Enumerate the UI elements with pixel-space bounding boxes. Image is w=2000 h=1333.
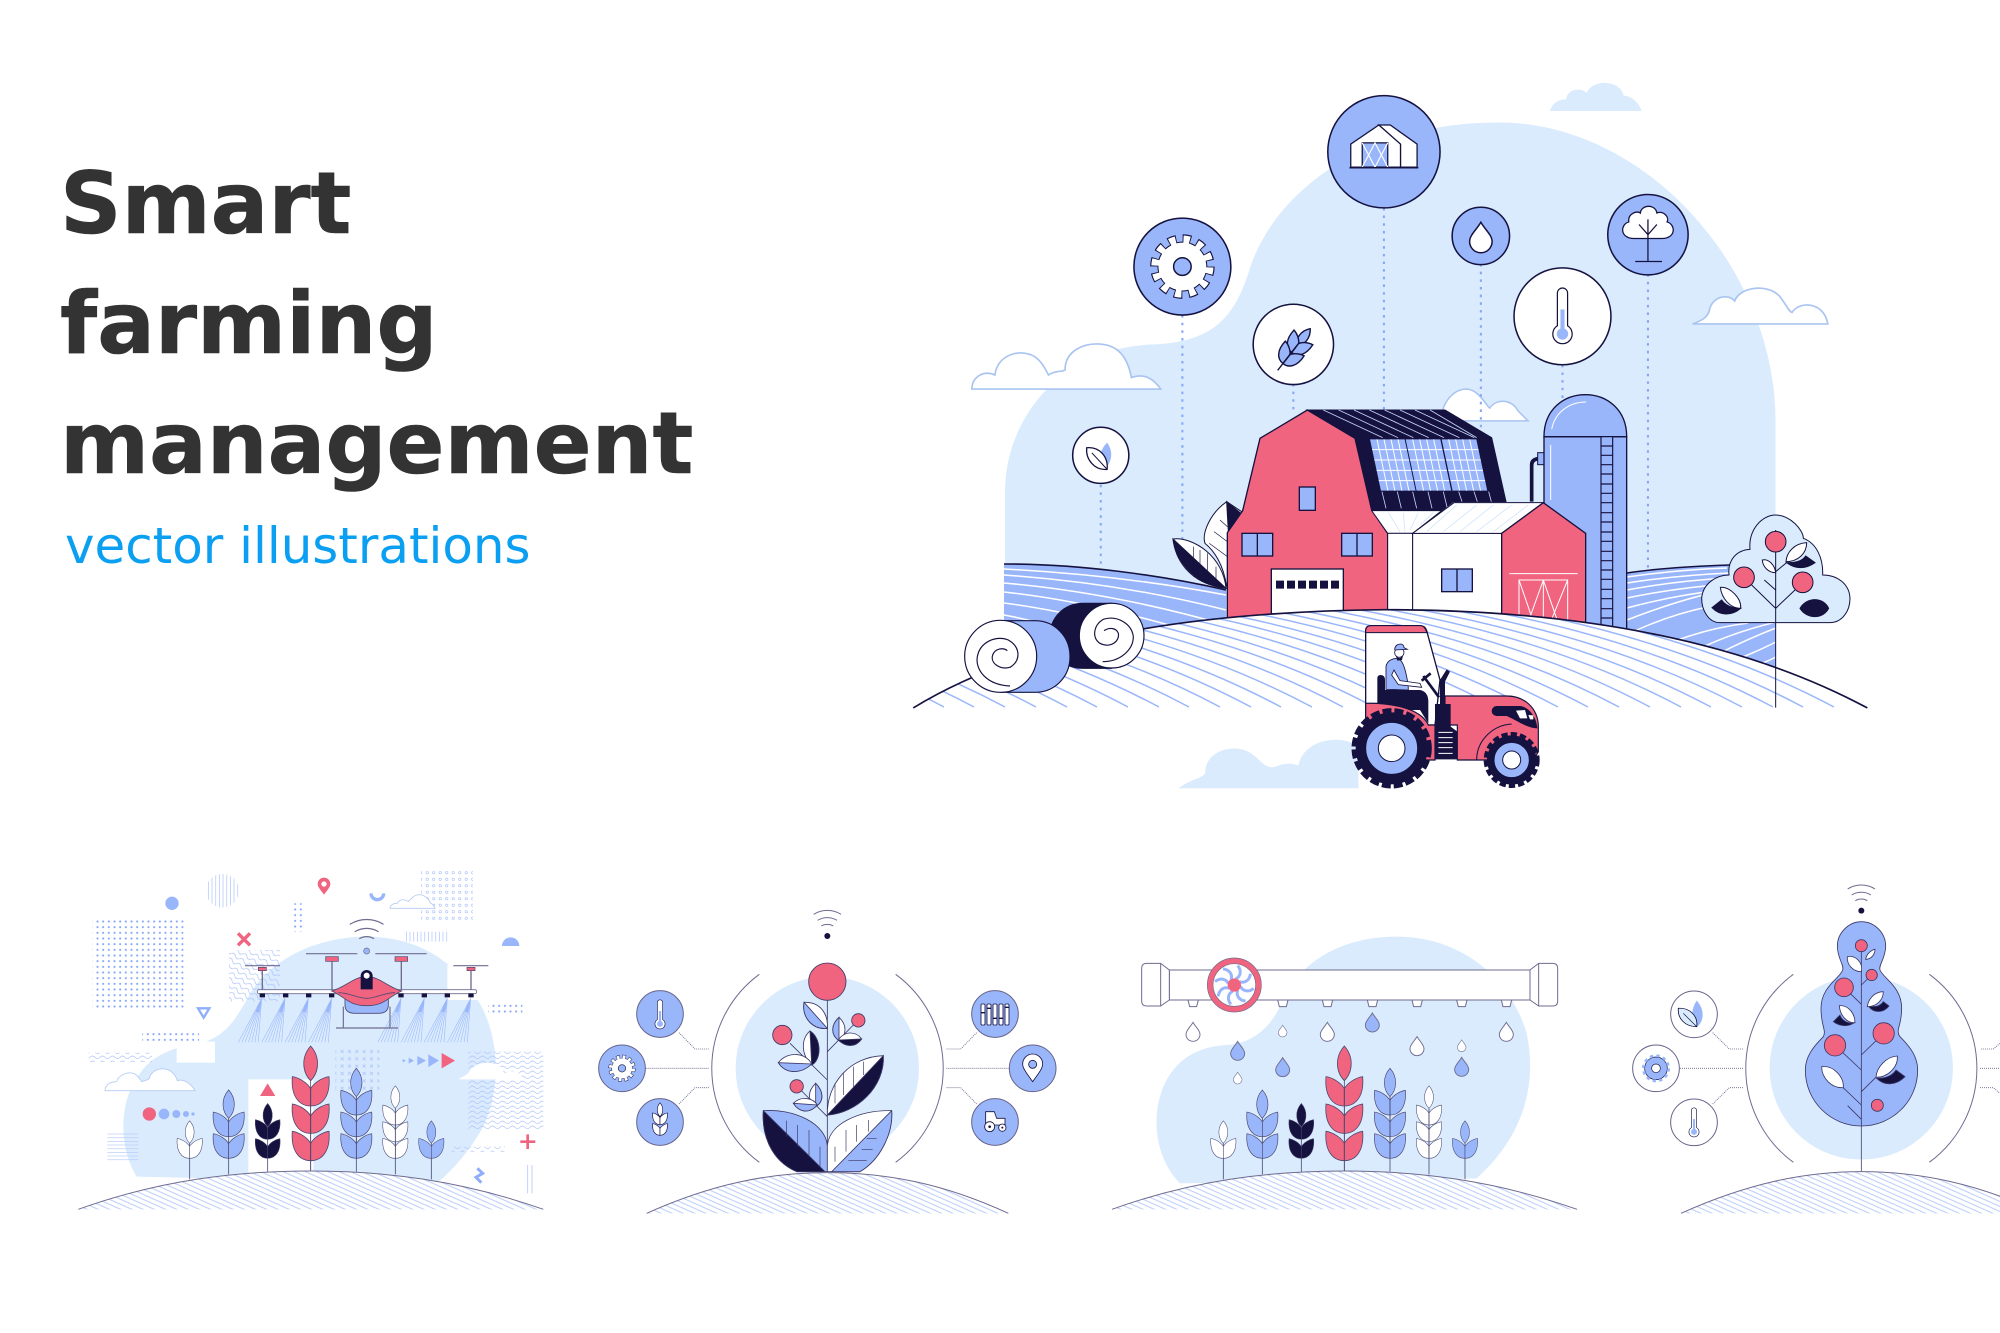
silo body xyxy=(1544,437,1627,633)
left field top edge xyxy=(1004,564,1226,590)
icon: thermometer xyxy=(637,991,683,1037)
ring grid xyxy=(421,870,473,922)
engine grille xyxy=(1435,704,1457,759)
silo ladder xyxy=(1601,437,1613,630)
garage door xyxy=(1271,569,1343,614)
silo pipe xyxy=(1532,459,1538,502)
silo highlights xyxy=(1551,402,1586,500)
right field xyxy=(1627,564,1776,680)
driver xyxy=(1386,644,1422,690)
tree fruit xyxy=(1824,940,1894,1111)
driver arm xyxy=(1392,670,1422,687)
boom nozzles xyxy=(260,989,474,1001)
exhaust xyxy=(1440,669,1450,704)
driver cap xyxy=(1395,644,1407,650)
background blob xyxy=(1005,122,1775,689)
white building window xyxy=(1442,569,1472,592)
icon: gear xyxy=(599,1045,645,1092)
connector wall xyxy=(1388,533,1413,613)
icon: map pin xyxy=(318,878,330,895)
tree branches xyxy=(1833,950,1887,1126)
blob white cut-outs xyxy=(177,965,490,1173)
wave strip left xyxy=(89,1053,152,1062)
bracket arcs xyxy=(712,974,943,1162)
half ring xyxy=(369,893,385,901)
solar panel 3 xyxy=(1442,439,1487,491)
tractor cab xyxy=(1366,626,1440,725)
nozzles xyxy=(1188,1000,1512,1007)
plus mark xyxy=(520,1134,535,1149)
icon: thermometer xyxy=(1514,268,1611,365)
driver beard xyxy=(1396,654,1403,661)
left field rows xyxy=(1004,569,1226,665)
rear body xyxy=(1366,703,1435,760)
icon: thermometer xyxy=(1671,1099,1717,1146)
icon: leaves xyxy=(1073,427,1129,483)
crops and hill xyxy=(1112,1046,1577,1209)
pipe right cap xyxy=(1530,963,1558,1006)
arrow row xyxy=(403,1053,455,1068)
panel: plant monitoring xyxy=(599,910,1056,1213)
tree leaves xyxy=(1822,949,1905,1088)
background blob xyxy=(123,937,496,1183)
big leaf: lower left xyxy=(763,1110,827,1172)
drone wifi xyxy=(350,920,383,954)
x pattern xyxy=(335,1048,379,1092)
cross mark xyxy=(238,933,250,945)
white building roof lines xyxy=(1427,505,1528,532)
big leaf: lower right xyxy=(827,1111,892,1172)
barn roof xyxy=(1307,410,1506,511)
background circle xyxy=(736,977,919,1160)
dot grid small xyxy=(142,1032,199,1043)
wave strip right xyxy=(452,1147,505,1152)
dotted connector lines xyxy=(1101,208,1648,577)
hay bale: front xyxy=(965,620,1070,692)
drone body xyxy=(332,977,402,1006)
icon: barn xyxy=(1328,96,1440,208)
red gable shed xyxy=(1502,503,1586,627)
solar panel 2 xyxy=(1406,439,1451,491)
driver head xyxy=(1395,648,1404,657)
tree crown xyxy=(1805,922,1918,1126)
background circle xyxy=(1770,976,1953,1160)
dots row xyxy=(143,1107,195,1121)
heading: farming: farming xyxy=(60,275,438,374)
panel: drone spraying xyxy=(78,870,543,1209)
irrigation pipe xyxy=(1142,963,1558,1007)
icon: tree xyxy=(1608,195,1688,275)
tractor xyxy=(1354,626,1538,786)
heading: Smart: Smart xyxy=(60,155,351,254)
left field xyxy=(1004,564,1226,650)
rotors xyxy=(245,954,488,966)
dot grid column xyxy=(292,903,304,932)
cloud: right xyxy=(458,1063,523,1079)
silo dome xyxy=(1544,395,1627,437)
cloud: centre xyxy=(1441,389,1528,421)
wave swatch right xyxy=(468,1052,543,1129)
hay bales xyxy=(965,603,1144,692)
mini hill xyxy=(647,1173,1008,1213)
icon: wheat xyxy=(1253,304,1334,385)
headlight band xyxy=(1492,706,1537,728)
half disc xyxy=(502,937,519,946)
icon: water drop xyxy=(1452,207,1510,265)
striped circle xyxy=(206,874,239,907)
plant stem and branches xyxy=(790,1000,853,1172)
hill crop rows xyxy=(928,610,1864,708)
heading: management: management xyxy=(60,395,693,494)
cloud: left xyxy=(972,344,1161,389)
panel: tree monitoring xyxy=(1633,885,2000,1213)
wave swatch xyxy=(229,950,280,1002)
background blob xyxy=(1157,937,1530,1183)
big leaf: middle right xyxy=(827,1056,883,1115)
right field top edge xyxy=(1627,565,1730,573)
water drops xyxy=(1186,1013,1513,1084)
cloud: top xyxy=(1550,83,1642,111)
lines swatch xyxy=(107,1132,138,1161)
icon: gear xyxy=(1134,218,1231,315)
plant xyxy=(763,963,892,1172)
dot grid right xyxy=(488,1002,522,1013)
barn red body xyxy=(1227,410,1388,620)
icon: tractor xyxy=(972,1099,1018,1145)
icon: leaves xyxy=(1671,991,1717,1038)
icon: map pin xyxy=(1009,1045,1056,1092)
sprays xyxy=(238,998,471,1042)
white building wall xyxy=(1413,533,1502,617)
tank and legs xyxy=(336,995,398,1028)
dot grid large xyxy=(93,919,183,1010)
right field rows xyxy=(1627,568,1776,663)
main hill xyxy=(913,610,1867,708)
tree crown xyxy=(1702,515,1850,623)
bracket arcs xyxy=(1746,974,1977,1162)
title xyxy=(60,155,693,575)
cloud: top xyxy=(390,895,435,908)
wifi signal xyxy=(814,910,841,939)
roof stripes xyxy=(1323,410,1491,508)
berries xyxy=(773,1014,865,1093)
icon: gear xyxy=(1633,1045,1679,1092)
rotor hubs and masts xyxy=(258,957,475,990)
cloud: left xyxy=(105,1069,195,1091)
cloud: bottom xyxy=(1179,740,1358,788)
pipe left cap xyxy=(1142,963,1169,1006)
small red triangle xyxy=(260,1083,275,1096)
tree on right xyxy=(1702,515,1850,708)
solar panels xyxy=(1370,439,1487,491)
barn and silo xyxy=(1173,395,1627,633)
plant: low leaf xyxy=(1173,539,1226,588)
barn window right xyxy=(1342,533,1372,556)
tree stem xyxy=(1860,950,1863,1172)
sensor connectors xyxy=(1680,1033,2000,1104)
steering xyxy=(1422,673,1439,697)
white building roof xyxy=(1413,503,1543,533)
hood xyxy=(1445,696,1538,760)
small leaves xyxy=(778,1002,862,1111)
barn window top xyxy=(1299,487,1315,510)
connector roof xyxy=(1372,511,1442,533)
zigzag xyxy=(476,1168,483,1183)
wifi signal xyxy=(1848,885,1875,914)
fan valve xyxy=(1207,958,1261,1012)
double lines xyxy=(528,1165,532,1193)
rear wheel xyxy=(1354,711,1429,786)
striped bar xyxy=(403,932,447,942)
solar panel 1 xyxy=(1370,439,1416,491)
tree fruit xyxy=(1734,531,1813,593)
mini hill xyxy=(1681,1172,2000,1213)
spray boom xyxy=(257,990,477,994)
driver body xyxy=(1386,659,1408,690)
subtitle: vector illustrations xyxy=(65,517,531,575)
barn window left xyxy=(1242,533,1273,556)
triangle outline xyxy=(198,1008,209,1018)
periwinkle circle xyxy=(165,897,179,910)
hay bale: rear xyxy=(1050,603,1144,668)
tree leaves xyxy=(1712,543,1829,617)
fender line xyxy=(1477,724,1512,760)
panel: irrigation xyxy=(1112,937,1577,1209)
tree stem and branches xyxy=(1752,530,1795,708)
silo pipe box xyxy=(1538,453,1544,465)
icon: sliders xyxy=(972,991,1018,1037)
crops and hill xyxy=(78,1046,543,1209)
front wheel xyxy=(1486,734,1538,786)
seat xyxy=(1377,675,1428,723)
icon: wheat xyxy=(637,1099,683,1145)
sensor connectors xyxy=(646,1033,1009,1104)
shed door xyxy=(1509,574,1578,625)
plant: tall leaf xyxy=(1204,502,1242,587)
flower xyxy=(809,963,846,1000)
cab roof band xyxy=(1366,626,1427,633)
pipe body xyxy=(1169,970,1530,1000)
drone camera xyxy=(361,970,373,989)
hill outline xyxy=(913,610,1867,708)
connector roof lines xyxy=(1388,513,1433,532)
cloud: right xyxy=(1693,288,1828,324)
panel: hero farm illustration xyxy=(912,82,1868,788)
